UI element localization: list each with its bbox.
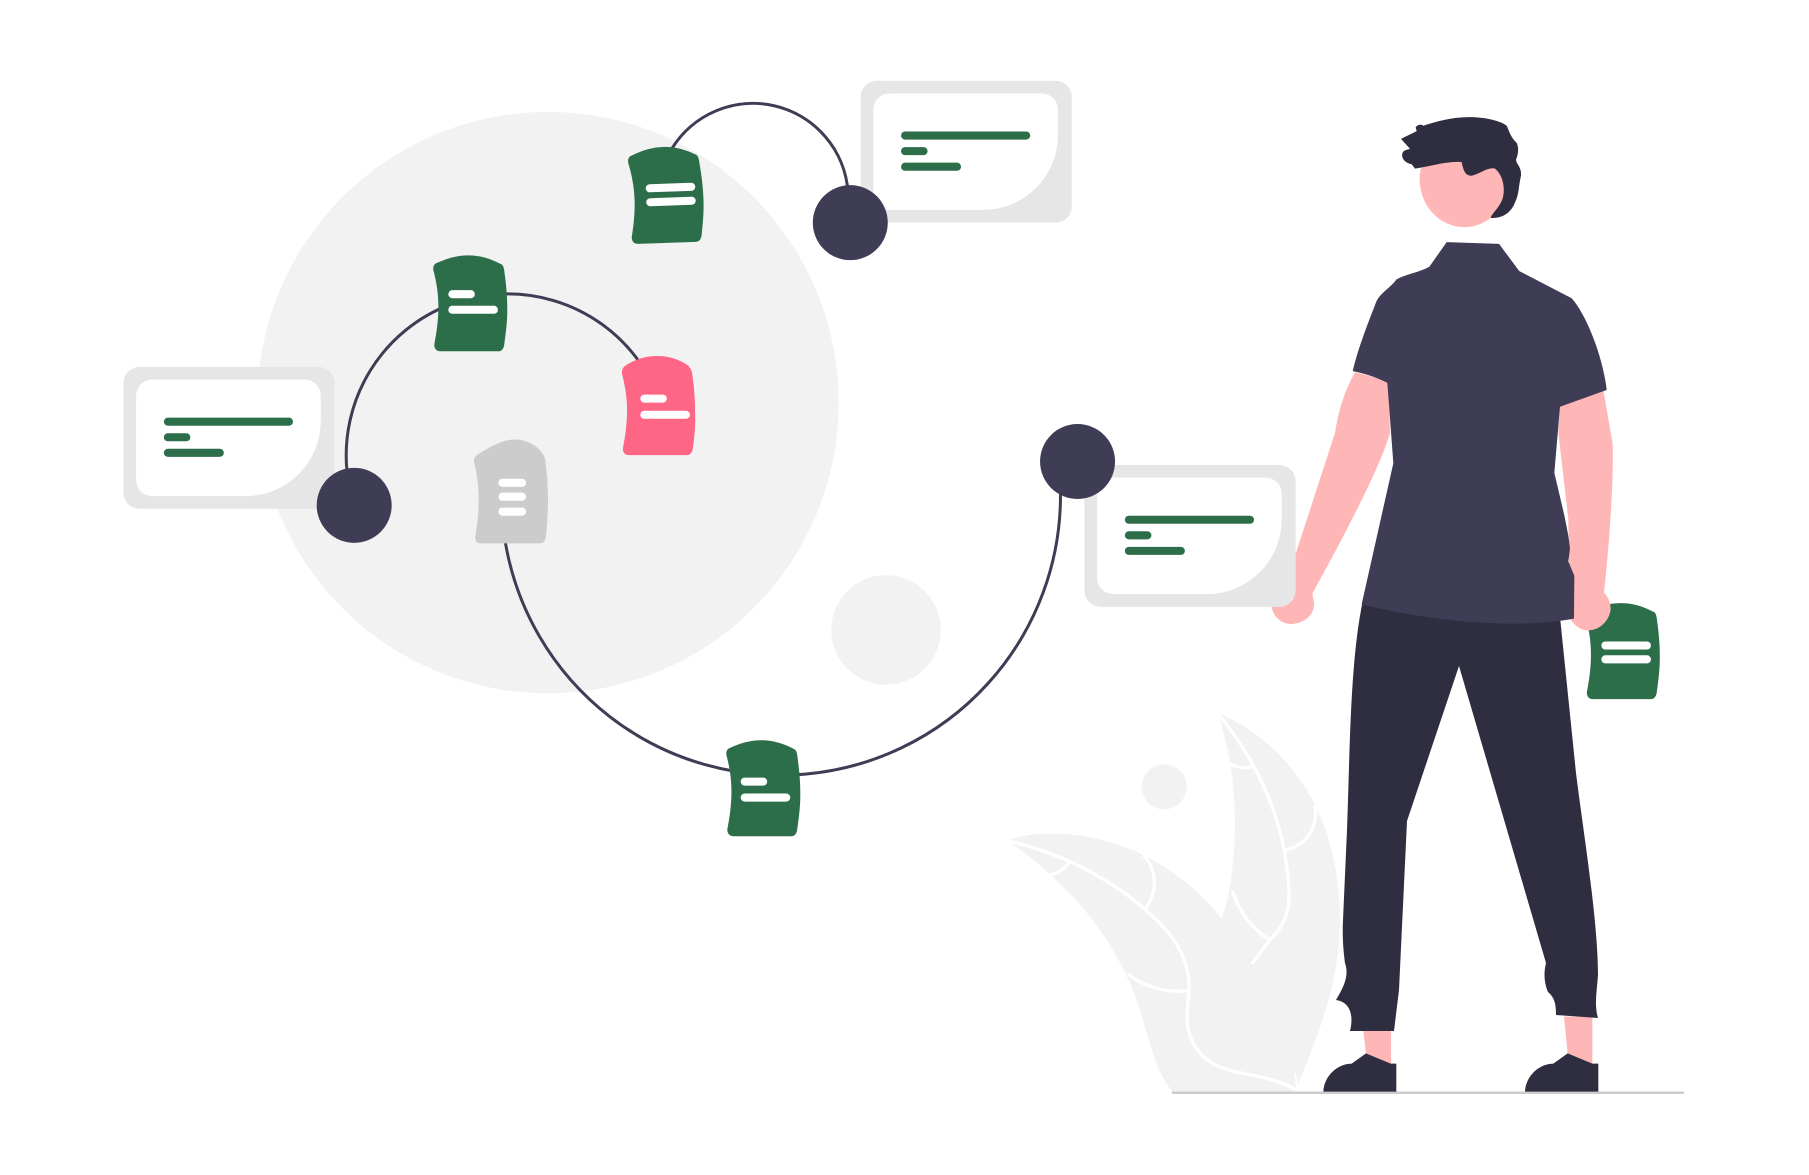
node: top [813,185,888,260]
arc: top [671,103,848,192]
plant leaves [1012,713,1340,1092]
plant veins [1012,714,1316,1091]
card: left [123,367,335,509]
document: bottom green [726,740,800,836]
card: top [861,81,1072,223]
card: right [1084,465,1296,607]
left arm [1272,372,1390,624]
head [1420,131,1509,227]
background small circle [831,575,941,685]
arc: left [346,294,638,471]
shirt [1353,242,1607,624]
document: grey [474,440,548,543]
document: top green [628,146,705,244]
hair [1401,117,1521,218]
ground line [1172,1092,1684,1094]
ankles and shoes [1323,1017,1598,1092]
arc: bottom [505,494,1060,775]
trousers [1336,600,1598,1031]
plant [1012,713,1340,1092]
document: pink [622,356,695,455]
person [1272,117,1613,1092]
document: held by person [1586,603,1660,699]
upper body [1272,117,1613,630]
foreground diagram elements [1040,424,1296,607]
left diagram: circles, cards, arcs and documents [123,81,1660,836]
node: right [1040,424,1115,499]
node: left [317,468,392,543]
background dot near plant [1142,764,1187,809]
right arm [1558,390,1613,630]
background large circle [257,112,839,693]
document: left green [433,255,507,351]
